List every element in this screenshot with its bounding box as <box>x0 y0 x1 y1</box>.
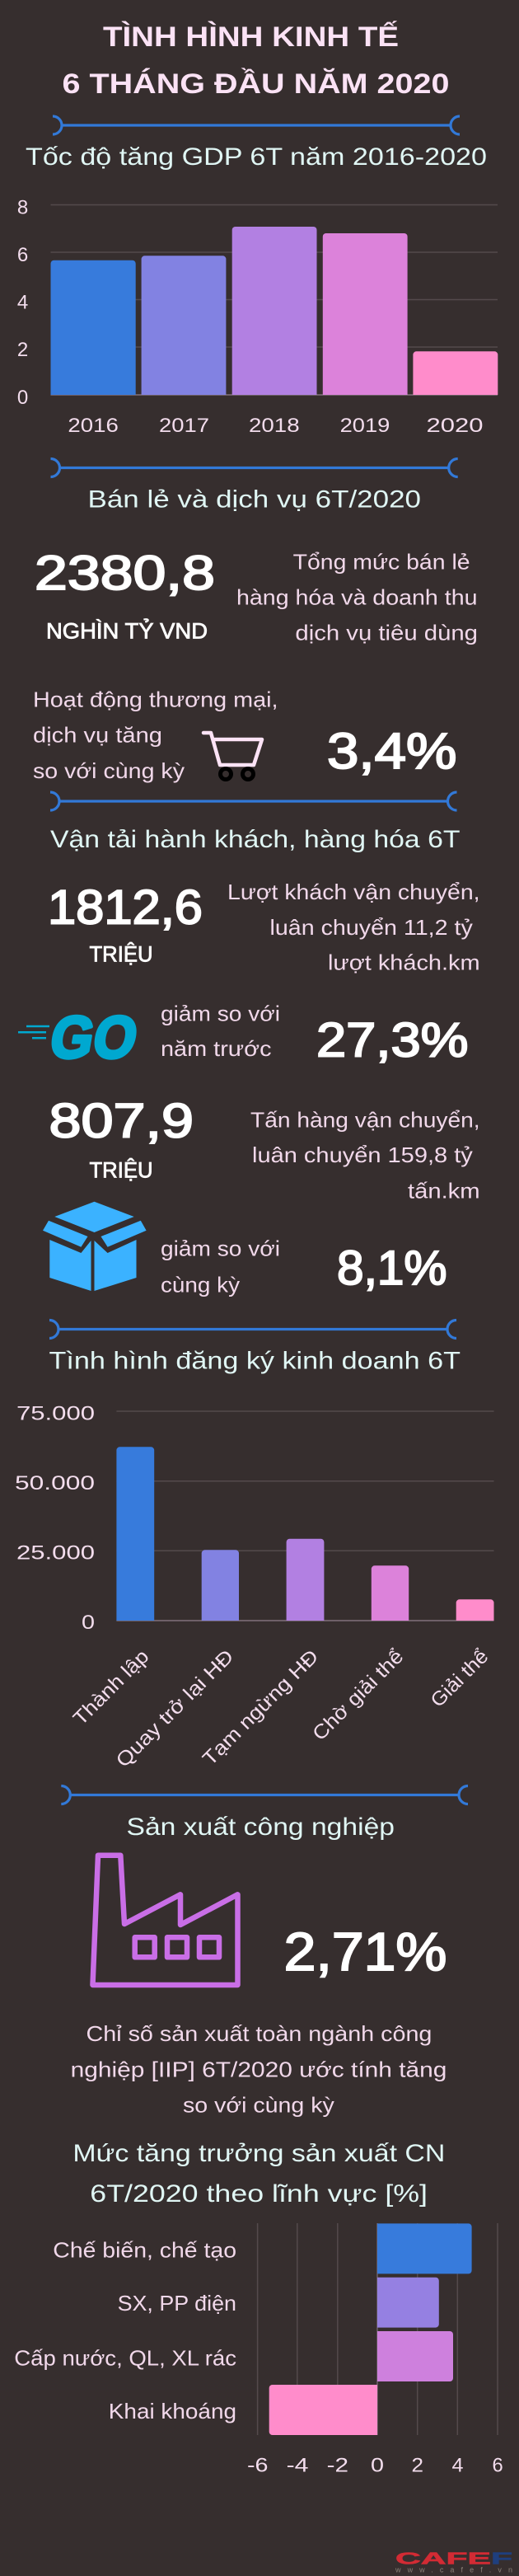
stat: passengers: TRIỆU <box>89 941 153 967</box>
icon: factory <box>92 1856 237 1985</box>
heading: transport: Vận tải hành khách, hàng hóa 6T <box>50 826 460 853</box>
bar chart: GDP growth: 4 <box>17 292 28 313</box>
text: passengers description <box>227 880 480 975</box>
bar chart: growth by sector: 6 <box>493 2454 503 2476</box>
logo: CafeF watermark: CAFE F <box>395 2550 512 2569</box>
text: retail description: hàng hóa và doanh thu <box>236 584 478 609</box>
text: industry description: so với cùng kỳ <box>183 2092 334 2117</box>
stat: passengers: 1812,6 <box>48 881 203 935</box>
bar chart: growth by sector: -6 <box>247 2454 269 2476</box>
title: TÌNH HÌNH KINH TẾ <box>103 21 399 53</box>
bar chart: GDP growth: 6 <box>17 244 28 266</box>
bar chart: GDP growth: 8 <box>17 196 28 218</box>
bar chart: business registration: 25.000 <box>16 1542 95 1565</box>
bar chart: growth by sector: Chế biến, chế tạo <box>53 2237 236 2262</box>
stat: passengers <box>48 881 203 967</box>
title: 6 THÁNG ĐẦU NĂM 2020 <box>63 68 450 100</box>
text: industry description: Chỉ số sản xuất toàn ngành công <box>86 2021 432 2046</box>
bar chart: business registration: 75.000 <box>16 1403 95 1425</box>
bar chart: business registration: Giải thể <box>427 1645 493 1712</box>
text: freight description <box>250 1107 480 1203</box>
bar chart: growth by sector: -4 <box>287 2454 308 2476</box>
text: industry description <box>71 2021 447 2117</box>
stat: total retail value: 2380,8 <box>35 547 215 600</box>
bar chart: growth by sector: 0 <box>371 2454 384 2476</box>
bar chart: growth by sector: Cấp nước, QL, XL rác <box>14 2346 236 2371</box>
stat: 3.4 percent: 3,4% <box>327 723 456 779</box>
text: retail description: Tổng mức bán lẻ <box>293 550 470 575</box>
text: passengers description: luân chuyển 11,2 tỷ <box>270 915 473 940</box>
stat: freight <box>49 1095 194 1182</box>
stat: 2.71 percent: 2,71% <box>284 1921 447 1982</box>
stat: total retail value <box>35 547 215 643</box>
text: passengers description: lượt khách.km <box>328 950 480 975</box>
icon: open box <box>43 1202 147 1291</box>
bar chart: GDP growth: 2017 <box>159 415 209 437</box>
heading: business registration: Tình hình đăng ký kinh doanh 6T <box>49 1348 461 1375</box>
text: retail description: dịch vụ tiêu dùng <box>295 621 478 645</box>
text: freight description: luân chuyển 159,8 tỷ <box>252 1143 473 1167</box>
text: freight description: tấn.km <box>408 1178 480 1203</box>
text: passengers decline: năm trước <box>161 1036 272 1061</box>
bar chart: GDP growth <box>17 196 498 437</box>
text: trade and services: Hoạt động thương mại, <box>33 687 278 712</box>
bar chart: GDP growth: 2018 <box>249 415 300 437</box>
bar chart: business registration: Tạm ngừng HĐ <box>199 1645 323 1770</box>
bar chart: business registration: Chờ giải thể <box>308 1645 408 1745</box>
bar chart: business registration: Thành lập <box>69 1645 153 1730</box>
bar chart: growth by sector <box>14 2223 503 2476</box>
icon: GO speed logo: O <box>88 1004 143 1070</box>
stat: freight: 807,9 <box>49 1095 194 1148</box>
bar chart: growth by sector: 2 <box>412 2454 423 2476</box>
text: freight decline: giảm so với <box>161 1236 280 1260</box>
bar chart: growth by sector: Khai khoáng <box>109 2399 236 2424</box>
icon: shopping cart <box>203 733 262 780</box>
bar chart: growth by sector: 4 <box>451 2454 463 2476</box>
text: passengers decline <box>161 1001 280 1061</box>
title <box>63 21 450 100</box>
text: trade and services <box>33 687 278 783</box>
stat: 8.1 percent: 8,1% <box>337 1241 447 1295</box>
bar chart: GDP growth: 2019 <box>340 415 390 437</box>
bar chart: business registration: 0 <box>82 1612 95 1634</box>
text: freight decline <box>161 1236 280 1297</box>
text: passengers decline: giảm so với <box>161 1001 280 1025</box>
bar chart: GDP growth: 2016 <box>68 415 119 437</box>
heading: growth by sector <box>72 2140 445 2208</box>
heading: GDP: Tốc độ tăng GDP 6T năm 2016-2020 <box>26 143 487 171</box>
heading: industry: Sản xuất công nghiệp <box>127 1814 395 1841</box>
stat: total retail value: NGHÌN TỶ VND <box>46 617 208 643</box>
icon: GO speed logo: G <box>45 1004 100 1070</box>
text: freight decline: cùng kỳ <box>161 1272 240 1297</box>
bar chart: GDP growth: 2 <box>17 339 28 361</box>
text: passengers description: Lượt khách vận chuyển, <box>227 880 480 904</box>
bar chart: business registration <box>15 1403 494 1772</box>
stat: freight: TRIỆU <box>89 1157 153 1182</box>
text: trade and services: so với cùng kỳ <box>33 758 185 783</box>
heading: retail: Bán lẻ và dịch vụ 6T/2020 <box>87 486 421 514</box>
bar chart: GDP growth: 0 <box>17 387 28 409</box>
bar chart: growth by sector: SX, PP điện <box>118 2291 236 2316</box>
stat: 27.3 percent: 27,3% <box>316 1014 468 1067</box>
heading: growth by sector: 6T/2020 theo lĩnh vực [%] <box>90 2180 428 2208</box>
logo: CafeF watermark: www.cafef.vn <box>395 2565 512 2574</box>
bar chart: GDP growth: 2020 <box>427 415 483 437</box>
text: industry description: nghiệp [IIP] 6T/2020 ước tính tăng <box>71 2057 447 2081</box>
text: freight description: Tấn hàng vận chuyển, <box>250 1107 480 1132</box>
bar chart: business registration: 50.000 <box>15 1472 95 1494</box>
heading: growth by sector: Mức tăng trưởng sản xuất CN <box>72 2140 445 2167</box>
bar chart: business registration: Quay trở lại HĐ <box>112 1645 238 1772</box>
text: trade and services: dịch vụ tăng <box>33 723 162 748</box>
bar chart: growth by sector: -2 <box>327 2454 348 2476</box>
text: retail description <box>236 550 478 645</box>
logo: CafeF watermark <box>395 2550 512 2574</box>
icon: GO speed logo <box>18 1004 143 1070</box>
